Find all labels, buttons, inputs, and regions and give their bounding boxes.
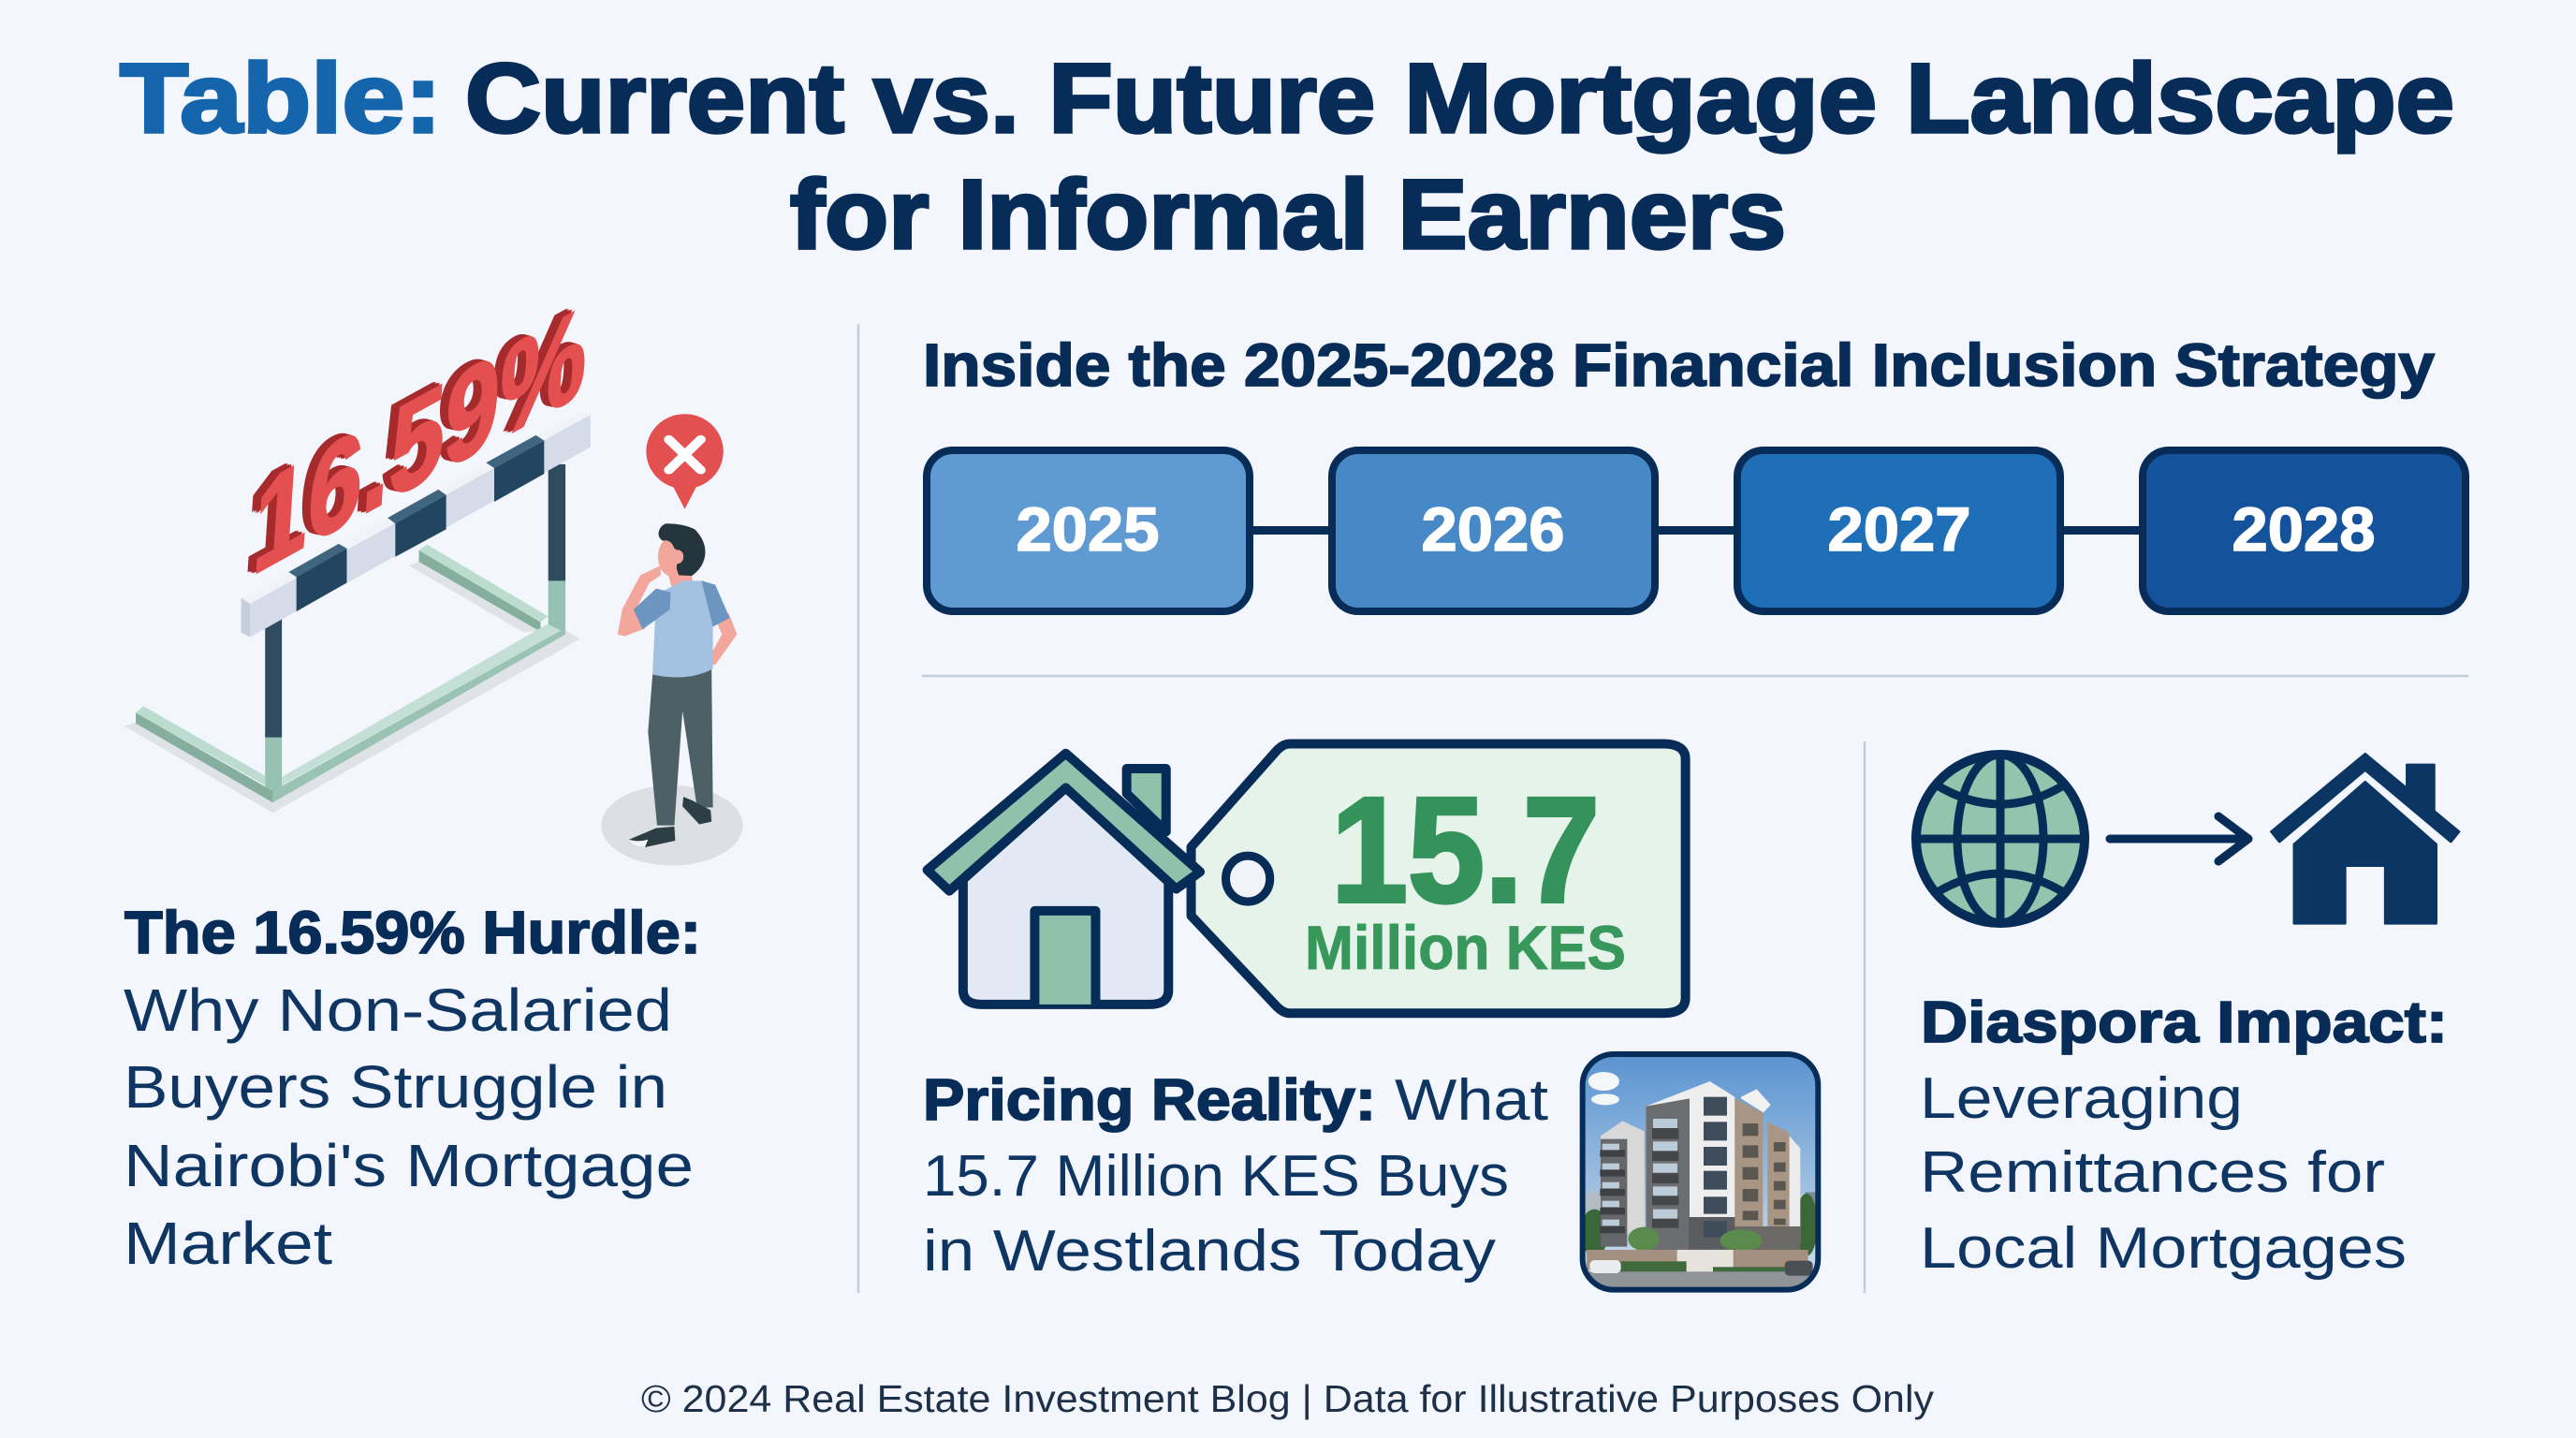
title line one: Current vs. Future Mortgage Landscape [465,44,2454,154]
pricing body: 15.7 Million KES Buys [923,1144,1509,1209]
price tag panel [928,743,1686,1013]
left body: Why Non-Salaried [124,976,672,1044]
left heading: The 16.59% Hurdle: [124,899,701,966]
diaspora body: Remittances for [1920,1140,2385,1205]
year 2027: 2027 [1827,494,1971,564]
pricing text block [923,1068,1548,1284]
strategy heading: Inside the 2025-2028 Financial Inclusion Strategy [923,331,2435,399]
year 2025 [927,450,1250,611]
hurdle bar [242,411,591,637]
pricing body: in Westlands Today [923,1219,1496,1284]
diaspora body [1920,1066,2407,1281]
16.59% figure: 16.59% [241,274,583,602]
year 2026: 2026 [1421,494,1565,564]
diaspora body: Local Mortgages [1920,1216,2407,1281]
year 2028: 2028 [2232,494,2376,564]
left body [124,976,694,1277]
diaspora panel [1916,754,2459,1281]
illustration: hurdle with 16.59% and person [124,411,743,866]
icon: red cross bubble [646,414,724,509]
footer: © 2024 Real Estate Investment Blog | Data for Illustrative Purposes Only [641,1377,1935,1420]
16.59% figure: 16.59% [244,275,587,603]
year 2028 [2143,450,2466,611]
left text block [124,899,701,1277]
left body: Market [124,1210,332,1277]
year 2027 [1737,450,2060,611]
pricing body [923,1068,1548,1284]
person [601,523,743,866]
year 2026 [1332,450,1655,611]
left body: Buyers Struggle in [124,1053,667,1121]
photo: apartment building [1580,1053,1819,1290]
diaspora body: Leveraging [1920,1066,2243,1131]
diaspora heading: Diaspora Impact: [1921,990,2448,1055]
16.59% figure: 16.59% [242,274,585,602]
16.59% figure: 16.59% [249,276,592,604]
pricing body: What [1395,1068,1548,1133]
left body: Nairobi's Mortgage [124,1132,694,1199]
price unit: Million KES [1305,913,1626,982]
icon: globe [1916,755,2085,923]
16.59% figure: 16.59% [246,275,589,603]
price tag shape [1192,743,1686,1013]
title [120,44,2454,270]
hurdle frame [124,464,580,813]
arrow [2110,816,2248,861]
title line two: for Informal Earners [790,160,1786,270]
title accent word: Table: [120,44,442,154]
icon: house [928,754,1200,1005]
pricing heading: Pricing Reality: [923,1068,1376,1133]
year 2025: 2025 [1017,494,1159,564]
timeline [927,450,2466,611]
icon: solid house [2271,754,2459,924]
price number: 15.7 [1331,766,1600,933]
